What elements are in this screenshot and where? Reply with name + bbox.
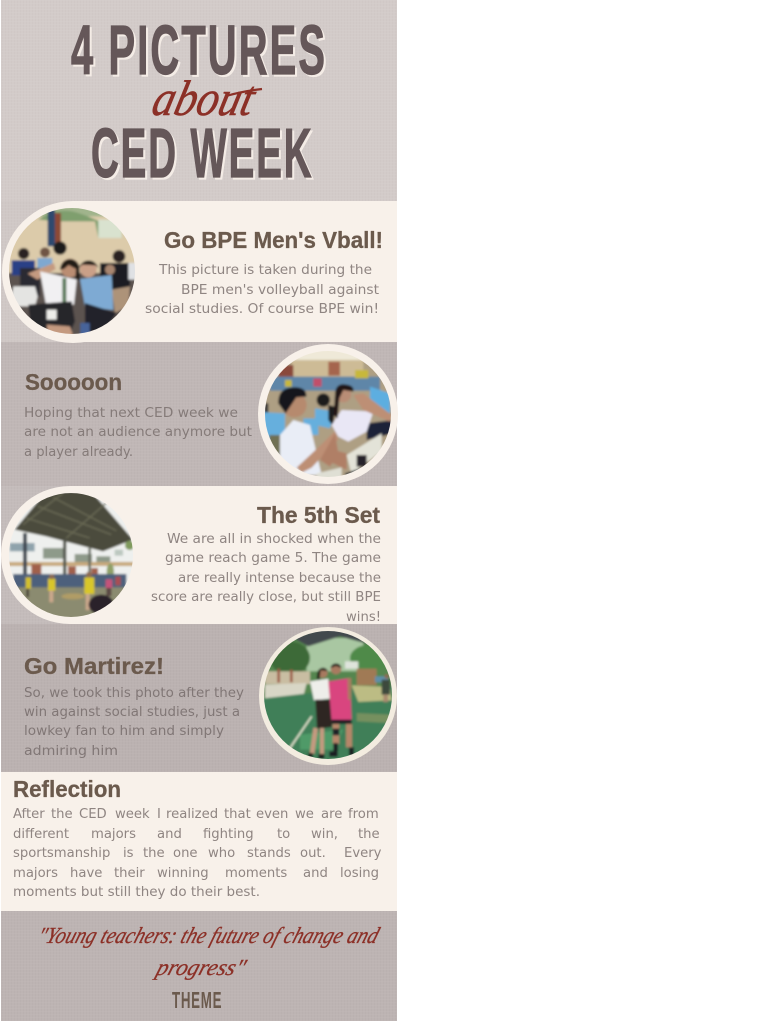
text block: So, we took this photo after they bbox=[24, 686, 244, 701]
text block: are not an audience anymore but bbox=[24, 425, 252, 440]
text block: moments bbox=[225, 866, 287, 881]
text block: losing bbox=[340, 866, 379, 881]
photo: students at volleyball game bbox=[9, 208, 135, 334]
text block bbox=[145, 263, 379, 317]
title: CED WEEK bbox=[93, 116, 315, 194]
heading: Sooooon bbox=[25, 369, 122, 395]
text block: have bbox=[70, 866, 102, 881]
text block: the bbox=[358, 827, 380, 842]
title: 4 PICTURES bbox=[71, 11, 327, 90]
text block bbox=[151, 532, 381, 625]
text block: to bbox=[277, 827, 290, 842]
text block: game reach game 5. The game bbox=[165, 551, 381, 566]
heading: Go BPE Men's Vball! bbox=[164, 227, 383, 253]
text block: win against social studies, just a bbox=[24, 705, 240, 720]
theme quote: progress" bbox=[151, 956, 249, 981]
text block: fighting bbox=[203, 827, 254, 842]
theme label: THEME bbox=[172, 987, 222, 1013]
text block: We are all in shocked when the bbox=[167, 532, 381, 547]
text block: even bbox=[256, 807, 288, 822]
text block: Hoping that next CED week we bbox=[24, 406, 238, 421]
text block: score are really close, but still BPE bbox=[151, 590, 381, 605]
text block: that bbox=[224, 807, 251, 822]
text block: their bbox=[114, 866, 145, 881]
panel: The 5th Set bbox=[0, 481, 397, 630]
text block: one bbox=[173, 846, 198, 861]
text block: the bbox=[143, 846, 165, 861]
text block: stands bbox=[247, 846, 291, 861]
text block: sportsmanship bbox=[13, 846, 110, 861]
photo: covered court bbox=[9, 493, 133, 617]
panel: Go Martirez bbox=[24, 621, 402, 770]
theme quote: "Young teachers: the future of change and bbox=[34, 924, 383, 949]
text block bbox=[13, 807, 382, 900]
text block: This picture is taken during the bbox=[158, 263, 372, 278]
text block: who bbox=[208, 846, 235, 861]
text block: we bbox=[295, 807, 314, 822]
theme quote bbox=[34, 924, 383, 981]
text block: wins! bbox=[346, 610, 381, 625]
text block: different bbox=[13, 827, 69, 842]
text block: winning bbox=[157, 866, 209, 881]
text block: CED bbox=[79, 807, 107, 822]
title: 4 PICTURES bbox=[73, 13, 329, 92]
text block bbox=[24, 406, 252, 460]
photo: students in the audience bbox=[265, 351, 391, 477]
text block: are bbox=[321, 807, 342, 822]
text block bbox=[24, 686, 244, 759]
text block: majors bbox=[91, 827, 136, 842]
text block: win, bbox=[311, 827, 338, 842]
text block: and bbox=[303, 866, 328, 881]
text block: week bbox=[115, 807, 150, 822]
text block: is bbox=[123, 846, 134, 861]
title: CED WEEK bbox=[91, 114, 313, 192]
heading: The 5th Set bbox=[257, 502, 380, 528]
text block: social studies. Of course BPE win! bbox=[145, 302, 379, 317]
text block: admiring him bbox=[24, 744, 118, 759]
text block: and bbox=[157, 827, 182, 842]
text block: the bbox=[51, 807, 73, 822]
text block: majors bbox=[13, 866, 58, 881]
text block: are really intense because the bbox=[178, 571, 381, 586]
text block: from bbox=[348, 807, 379, 822]
text block: lowkey fan to him and simply bbox=[24, 724, 224, 739]
title: about bbox=[147, 71, 263, 126]
text block: out. bbox=[300, 846, 326, 861]
heading: Reflection bbox=[13, 776, 121, 802]
text block: BPE men's volleyball against bbox=[181, 283, 379, 298]
text block: I bbox=[157, 807, 161, 822]
panel: Reflection bbox=[1, 772, 397, 911]
heading: Go Martirez! bbox=[24, 653, 164, 679]
page background bbox=[1, 0, 397, 1021]
text block: After bbox=[13, 807, 45, 822]
panel: Go BPE Men's Vball bbox=[0, 196, 397, 345]
panel: Sooooon bbox=[24, 338, 402, 487]
text block: a player already. bbox=[24, 445, 133, 460]
photo: two people on green court bbox=[264, 631, 392, 759]
text block: moments but still they do their best. bbox=[13, 885, 260, 900]
text block: Every bbox=[344, 846, 382, 861]
text block: realized bbox=[166, 807, 218, 822]
title bbox=[71, 11, 329, 194]
